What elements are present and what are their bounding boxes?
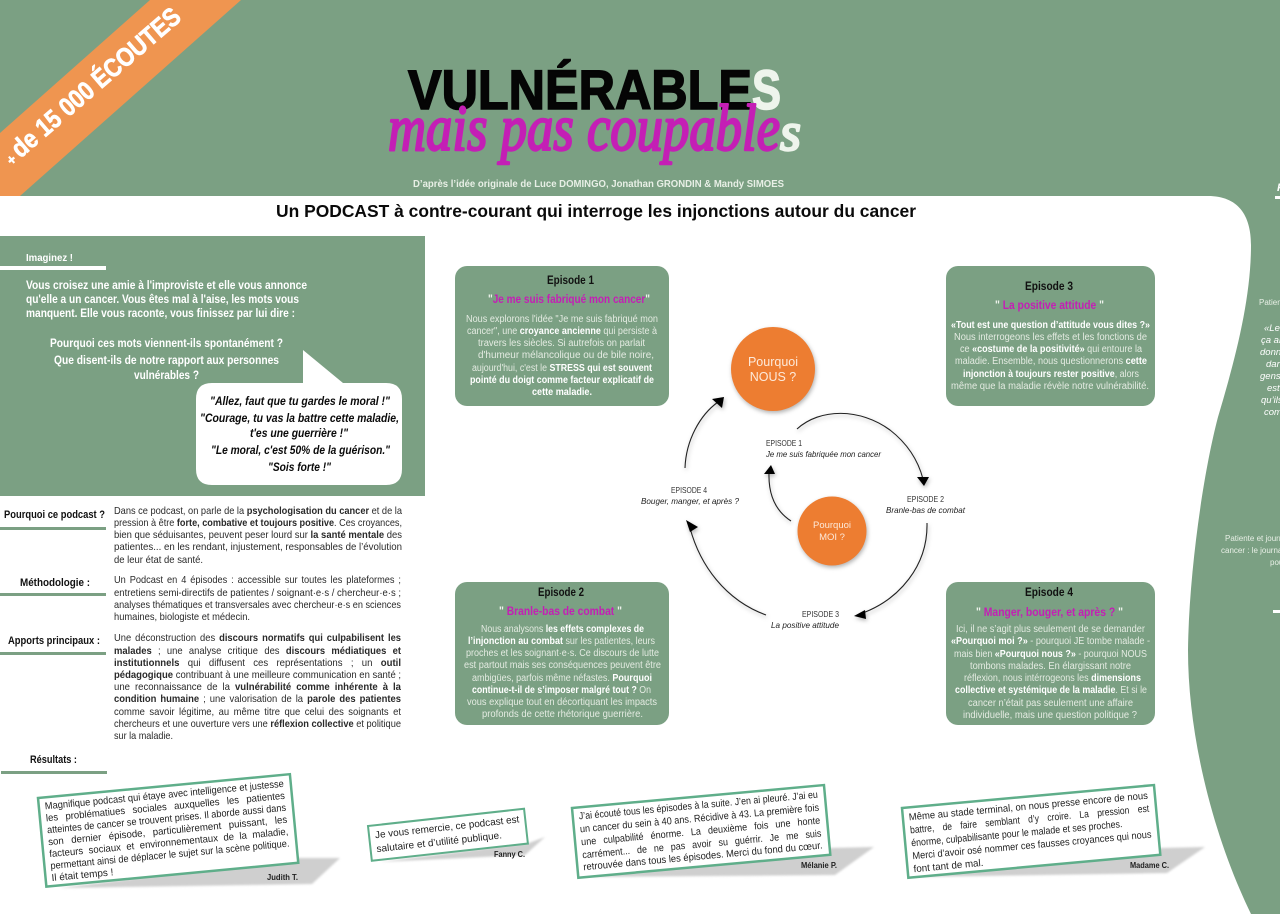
panel: episode 2: ambigües, parfois même néfastes. Pourquoi xyxy=(472,673,652,684)
testimonial: Fanny C.: Je vous remercie, ce podcast est xyxy=(375,814,520,841)
testimonial: Judith T.: les problématiues sociales auxquelles les patientes xyxy=(45,791,285,824)
panel: episode 2: est partout mais ses conséquences peuvent être xyxy=(464,660,661,671)
speech bubble xyxy=(196,350,402,485)
testimonial: Fanny C.: Fanny C. xyxy=(494,850,525,859)
testimonial: Madame C.: Madame C. xyxy=(1130,861,1169,870)
panel: episode 4: cancer n’était pas seulement une affaire xyxy=(968,698,1133,709)
panel: episode 1: cancer", une croyance ancienne qui persiste à xyxy=(467,326,657,337)
section: pourquoi ce podcast: de leur état de santé. xyxy=(114,555,203,566)
section: apports principaux: condition humaine ; une valorisation de la parole des patientes xyxy=(114,694,401,705)
circle: pourquoi moi xyxy=(798,496,866,566)
panel: episode 4: individuelle, mais une question politique ? xyxy=(963,710,1137,721)
label: episode 2 xyxy=(886,494,966,515)
main heading: Un PODCAST à contre-courant qui interroge les injonctions autour du cancer xyxy=(276,201,916,221)
label: episode 1: Je me suis fabriquée mon cancer xyxy=(765,449,882,459)
testimonial: Madame C.: Même au stade terminal, on nous presse encore de nous xyxy=(908,791,1148,823)
imagine scenario text xyxy=(26,280,307,320)
testimonial: Mélanie P.: carrément... de ne pas avoir su guérrir. Je me suis xyxy=(582,829,822,861)
imagine questions: Que disent-ils de notre rapport aux personnes xyxy=(54,355,279,367)
imagine scenario text: qu'elle a un cancer. Vous êtes mal à l'aise, les mots vous xyxy=(26,294,299,306)
panel: episode 1: "Je me suis fabriqué mon cancer" xyxy=(488,294,650,306)
panel: episode 2: Nous analysons les effets complexes de xyxy=(481,624,644,635)
panel: episode 2: Episode 2 xyxy=(538,587,584,599)
section: pourquoi ce podcast: bien que séduisantes, peuvent peser lourd sur la santé mentale des xyxy=(114,530,402,541)
panel: episode 4: mais bien «Pourquoi nous ?» - pourquoi NOUS xyxy=(954,649,1147,660)
section: pourquoi ce podcast: pression à être forte, combative et toujours positive. Ces croyances, xyxy=(114,518,402,529)
circle: pourquoi moi: MOI ? xyxy=(819,532,845,543)
arrow: episode 3 to episode 4 xyxy=(686,520,766,615)
section: apports principaux: malades ; une analyse critique des discours médiatiques et xyxy=(114,646,402,657)
testimonial: Mélanie P.: une culpabilité énorme. La deuxième fois une honte xyxy=(581,816,821,848)
panel: episode 3: même que la maladie révèle notre vulnérabilité. xyxy=(951,381,1149,392)
panel: episode 2: " Branle-bas de combat " xyxy=(499,606,622,618)
panel: episode 1: d'humeur mélancolique ou de bile noire, xyxy=(478,350,654,361)
label: episode 4: EPISODE 4 xyxy=(671,485,707,495)
testimonial: Fanny C. xyxy=(368,809,545,862)
right panel: cropped text: gens xyxy=(1260,371,1280,382)
testimonial: Madame C. xyxy=(902,785,1205,878)
panel: episode 1: cette maladie. xyxy=(532,387,592,398)
panel: episode 3: maladie. Ensemble, nous questionnerons cette xyxy=(955,356,1147,367)
section: resultats heading xyxy=(1,754,107,774)
authors credit: D’après l’idée originale de Luce DOMINGO, Jonathan GRONDIN & Mandy SIMOES xyxy=(413,179,784,190)
testimonial: Madame C.: battre, de faire semblant d’y croire. La pression est xyxy=(910,804,1150,836)
testimonial: Madame C.: Merci d’avoir osé nommer ces fausses croyances qui nous xyxy=(912,830,1152,862)
testimonial: Mélanie P.: Mélanie P. xyxy=(801,861,837,870)
panel: episode 3: Nous interrogeons les effets et les fonctions de xyxy=(954,332,1147,343)
panel: episode 3: «Tout est une question d’attitude vous dites ?» xyxy=(951,320,1150,331)
logo title: VULNÉRABLE xyxy=(408,58,752,121)
testimonial: Judith T.: son dernier épisode, particulièrement puissant, les xyxy=(48,815,288,848)
section: apports principaux xyxy=(0,633,402,742)
section: methodologie: Un Podcast en 4 épisodes : accessible sur toutes les plateformes ; xyxy=(114,575,401,586)
logo title: S xyxy=(752,58,781,121)
arrow: episode 1 to episode 2 xyxy=(797,413,929,486)
section: apports principaux: pédagogique contribuant à une meilleure communication en santé ; xyxy=(114,670,401,681)
testimonial: Judith T.: Judith T. xyxy=(267,873,298,882)
imagine heading: Imaginez ! xyxy=(26,252,73,264)
arrow: episode 4 to pourquoi nous xyxy=(685,397,724,468)
panel: episode 4: réflexion, nous intérrogeons les dimensions xyxy=(964,673,1141,684)
panel: episode 3: injonction à toujours rester positive, alors xyxy=(963,369,1139,380)
panel: episode 2: profonds de cette rhétorique guerrière. xyxy=(482,709,643,720)
logo title: mais pas coupable xyxy=(388,92,780,165)
panel: episode 4: Episode 4 xyxy=(1025,587,1074,599)
testimonial: Judith T.: facteurs sociaux et environnementaux de la maladie, xyxy=(49,827,289,860)
logo title xyxy=(388,58,801,165)
panel: episode 2: proches et les soignant·e·s. Ce discours de lutte xyxy=(466,648,659,659)
panel: episode 1: travers les siècles. Si autrefois on parlait xyxy=(478,338,645,349)
speech bubble: t'es une guerrière !" xyxy=(250,428,348,440)
section: apports principaux: comme savoir légitime, au même titre que celui des soignants et xyxy=(114,707,401,718)
circle: pourquoi moi: Pourquoi xyxy=(813,520,851,531)
section: pourquoi ce podcast: Pourquoi ce podcast ? xyxy=(4,509,105,521)
label: episode 3: EPISODE 3 xyxy=(802,609,839,619)
testimonial: Judith T.: atteintes de cancer se trouvent prises. Il aborde aussi dans xyxy=(47,803,287,836)
logo title: s xyxy=(780,102,801,162)
section: methodologie: humaines, biologiste et médecin. xyxy=(114,612,250,623)
testimonial: Mélanie P. xyxy=(572,785,874,878)
panel: episode 2: vous explique tout en décortiquant les impacts xyxy=(467,697,657,708)
panel: imagine xyxy=(0,236,425,496)
testimonial: Mélanie P.: J’ai écouté tous les épisodes à la suite. J’en ai pleuré. J’ai eu xyxy=(578,790,818,822)
testimonial: Judith T.: Magnifique podcast qui étaye avec intelligence et justesse xyxy=(44,779,285,812)
panel: episode 4: «Pourquoi moi ?» - pourquoi JE tombe malade - xyxy=(951,636,1150,647)
label: episode 4 xyxy=(641,485,739,506)
imagine scenario text: manquent. Elle vous raconte, vous finissez par lui dire : xyxy=(26,308,295,320)
section: pourquoi ce podcast: patientes... en les rendant, injustement, responsables de l’évolution xyxy=(114,542,402,553)
testimonial: Mélanie P.: un cancer du sein à 40 ans. Récidive à 43. La première fois xyxy=(580,803,820,835)
section: methodologie: analyses thématiques et transversales avec chercheur·e·s en sciences xyxy=(114,600,401,611)
arrow: pourquoi moi to episode 1 xyxy=(764,465,791,521)
right panel: cropped text xyxy=(1221,182,1280,613)
section: apports principaux: chercheurs et une ouverture vers une réflexion collective et politique xyxy=(114,719,401,730)
section: apports principaux: institutionnels qui diffusent ces représentations ; un outil xyxy=(114,658,401,669)
testimonial: Madame C.: font tant de mal. xyxy=(913,858,984,875)
speech bubble: "Le moral, c'est 50% de la guérison." xyxy=(211,445,390,457)
panel: episode 3: " La positive attitude " xyxy=(995,300,1104,312)
label: episode 1: EPISODE 1 xyxy=(766,438,802,448)
testimonial: Madame C.: énorme, culpabilisante pour le malade et ses proches. xyxy=(911,819,1123,849)
panel: episode 4 xyxy=(946,582,1155,725)
section: apports principaux: Apports principaux : xyxy=(8,635,100,647)
imagine questions: Pourquoi ces mots viennent-ils spontanément ? xyxy=(50,338,283,350)
section: methodologie xyxy=(0,575,401,623)
panel: episode 1: aujourd'hui, c'est le STRESS qui est souvent xyxy=(472,363,653,374)
label: episode 4: Bouger, manger, et après ? xyxy=(641,496,739,506)
label: episode 3: La positive attitude xyxy=(771,620,839,630)
panel: episode 4: Ici, il ne s’agit plus seulement de se demander xyxy=(956,624,1146,635)
label: episode 3 xyxy=(771,609,839,630)
panel: episode 1: Nous explorons l'idée "Je me suis fabriqué mon xyxy=(466,314,658,325)
panel: episode 1 xyxy=(455,266,669,406)
testimonial: Judith T.: Il était temps ! xyxy=(51,867,114,884)
testimonial: Mélanie P.: retrouvée dans tous les épisodes. Merci du fond du cœur. xyxy=(583,840,823,873)
circle: pourquoi nous xyxy=(731,327,815,411)
imagine scenario text: Vous croisez une amie à l'improviste et elle vous annonce xyxy=(26,280,307,292)
imagine questions: vulnérables ? xyxy=(134,370,199,382)
circle: pourquoi nous: Pourquoi xyxy=(748,355,798,369)
section: pourquoi ce podcast xyxy=(0,506,402,566)
circle: pourquoi nous: NOUS ? xyxy=(750,370,796,384)
panel: episode 4: collective et systémique de la maladie. Et si le xyxy=(955,685,1147,696)
label: episode 1 xyxy=(765,438,882,459)
speech bubble: "Courage, tu vas la battre cette maladie, xyxy=(200,413,399,425)
panel: episode 2: continue-t-il de s’imposer malgré tout ? On xyxy=(472,685,651,696)
panel: episode 3 xyxy=(946,266,1155,406)
panel: episode 3: ce «costume de la positivité» qui entoure la xyxy=(960,344,1142,355)
imagine questions xyxy=(50,338,283,382)
testimonial: Judith T. xyxy=(38,774,340,888)
speech bubble: "Sois forte !" xyxy=(268,462,331,474)
section: apports principaux: Une déconstruction des discours normatifs qui culpabilisent les xyxy=(114,633,401,644)
testimonial: Judith T.: permettant ainsi de déplacer le sujet sur la scène politique. xyxy=(50,839,290,872)
panel: episode 3: Episode 3 xyxy=(1025,281,1073,293)
speech bubble: "Allez, faut que tu gardes le moral !" xyxy=(210,396,390,408)
panel: episode 4: " Manger, bouger, et après ? " xyxy=(976,607,1123,619)
panel: episode 2: l’injonction au combat sur les patientes, leurs xyxy=(468,636,655,647)
testimonial: Fanny C.: salutaire et d’utilité publique. xyxy=(376,830,502,855)
imagine heading xyxy=(0,252,106,270)
section: methodologie: entretiens semi-directifs de patientes / soignant·e·s / chercheur·e·s ; xyxy=(114,588,401,599)
section: apports principaux: sur la maladie. xyxy=(114,731,173,742)
panel: episode 2 xyxy=(455,582,669,725)
section: pourquoi ce podcast: Dans ce podcast, on parle de la psychologisation du cancer et de la xyxy=(114,506,402,517)
section: apports principaux: une reconnaissance de la vulnérabilité comme inhérente à la xyxy=(114,682,401,693)
label: episode 2: Branle-bas de combat xyxy=(886,505,966,515)
section: resultats heading: Résultats : xyxy=(30,754,77,766)
panel: episode 4: tombons malades. En élargissant notre xyxy=(970,661,1131,672)
label: episode 2: EPISODE 2 xyxy=(907,494,944,504)
arrow: episode 2 to episode 3 xyxy=(854,523,927,619)
right panel: cropped text: est xyxy=(1267,383,1280,394)
panel: episode 1: pointé du doigt comme facteur explicatif de xyxy=(470,375,654,386)
right panel: cropped text: dar xyxy=(1266,359,1280,370)
section: methodologie: Méthodologie : xyxy=(20,577,90,589)
cycle diagram xyxy=(641,327,966,630)
panel: episode 1: Episode 1 xyxy=(547,275,595,287)
